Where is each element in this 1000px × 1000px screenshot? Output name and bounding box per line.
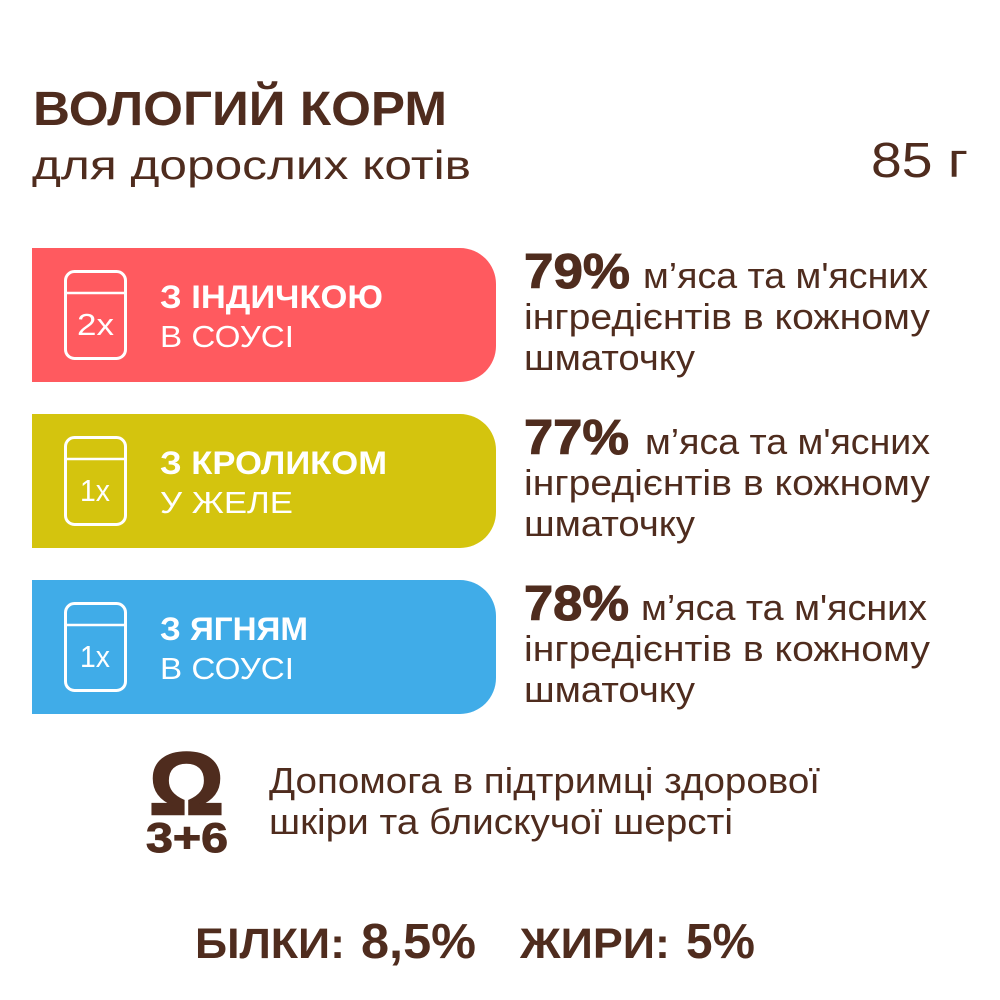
icon: pouch 2x: 2x bbox=[77, 307, 115, 342]
text block: 77% meat: інгредієнтів в кожному bbox=[524, 462, 930, 503]
text block: 79% meat bbox=[524, 245, 930, 378]
panel: rabbit in jelly bbox=[32, 414, 496, 548]
icon: omega 3+6 bbox=[146, 734, 228, 861]
title bbox=[32, 81, 471, 188]
weight label: 85 г bbox=[871, 134, 968, 188]
text block: 79% meat: інгредієнтів в кожному bbox=[524, 296, 930, 337]
text block: 79% meat: м’яса та м'ясних bbox=[643, 255, 928, 296]
panel: lamb in sauce bbox=[32, 580, 496, 714]
icon: pouch 1x: 1x bbox=[80, 639, 110, 674]
text block: 78% meat: 78% bbox=[524, 577, 629, 631]
flavour label: У ЖЕЛЕ bbox=[160, 485, 293, 520]
icon: pouch 1x: 1x bbox=[80, 473, 110, 508]
text block: 79% meat: 79% bbox=[524, 245, 630, 299]
text block: 78% meat: шматочку bbox=[524, 669, 695, 710]
flavour label: В СОУСІ bbox=[160, 319, 294, 354]
text block: 77% meat: шматочку bbox=[524, 503, 695, 544]
text block: skin and coat benefit: Допомога в підтримці здорової bbox=[269, 760, 820, 801]
icon: omega 3+6: 3+6 bbox=[146, 814, 228, 861]
flavour label: З ІНДИЧКОЮ bbox=[160, 279, 383, 315]
icon: pouch 1x bbox=[66, 604, 126, 690]
icon: pouch 2x bbox=[66, 272, 126, 358]
text block: skin and coat benefit: шкіри та блискучої шерсті bbox=[269, 801, 733, 842]
title: ВОЛОГИЙ КОРМ bbox=[33, 81, 447, 136]
panel: turkey in sauce bbox=[32, 248, 496, 382]
fat value: ЖИРИ: bbox=[519, 920, 670, 968]
text block: 79% meat: шматочку bbox=[524, 337, 695, 378]
protein value: 8,5% bbox=[361, 915, 476, 969]
flavour label bbox=[160, 279, 383, 354]
flavour label bbox=[160, 445, 387, 520]
flavour label: В СОУСІ bbox=[160, 651, 294, 686]
text block: 78% meat bbox=[524, 577, 930, 710]
icon: omega 3+6: Ω bbox=[149, 734, 224, 833]
text block: 78% meat: інгредієнтів в кожному bbox=[524, 628, 930, 669]
protein value bbox=[195, 915, 476, 969]
icon: pouch 1x bbox=[66, 438, 126, 524]
title: для дорослих котів bbox=[32, 142, 471, 188]
fat value bbox=[519, 915, 755, 969]
text block: 78% meat: м’яса та м'ясних bbox=[641, 587, 927, 628]
text block: 77% meat: м’яса та м'ясних bbox=[645, 421, 930, 462]
flavour label: З КРОЛИКОМ bbox=[160, 445, 387, 481]
text block: 77% meat bbox=[524, 411, 930, 544]
flavour label bbox=[160, 611, 308, 686]
text block: skin and coat benefit bbox=[269, 760, 820, 842]
fat value: 5% bbox=[686, 915, 755, 969]
text block: 77% meat: 77% bbox=[524, 411, 629, 465]
protein value: БІЛКИ: bbox=[195, 920, 345, 968]
flavour label: З ЯГНЯМ bbox=[160, 611, 308, 647]
